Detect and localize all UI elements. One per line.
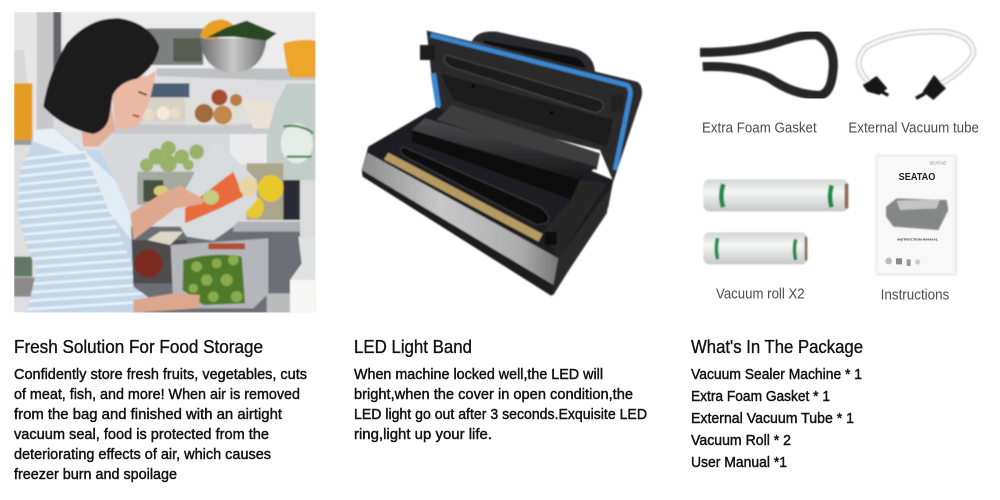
heading: What's In The Package: What's In The Package [691, 336, 863, 357]
body: food storage description [14, 366, 307, 483]
body: food storage description: of meat, fish, and more! When air is removed [14, 386, 300, 403]
fridge shelves [157, 68, 316, 80]
lower drawer [128, 240, 187, 283]
photo: woman storing vacuum-sealed food in a fridge [14, 12, 317, 313]
body: food storage description: deteriorating effects of air, which causes [14, 446, 271, 463]
milk bottle [290, 236, 304, 281]
body: list of package items: Vacuum Roll * 2 [691, 432, 791, 449]
label: External Vacuum tube: External Vacuum tube [848, 121, 979, 137]
body: list of package items [691, 366, 862, 471]
lid gasket [444, 55, 603, 113]
lemons [247, 163, 283, 220]
body: LED description: LED light go out after 3 seconds.Exquisite LED [354, 406, 647, 423]
body: food storage description: vacuum seal, food is protected from the [14, 426, 269, 443]
body: list of package items: Vacuum Sealer Machine * 1 [691, 366, 862, 383]
icon: foam gasket [700, 35, 833, 95]
shirt [17, 128, 150, 313]
body: list of package items: Extra Foam Gasket * 1 [691, 388, 830, 405]
body: list of package items: External Vacuum Tube * 1 [691, 410, 854, 427]
icon: instruction manual: SEATAO [899, 172, 936, 183]
LED band [431, 35, 630, 170]
vacuum bag with salmon [173, 154, 258, 242]
body: food storage description: freezer burn and spoilage [14, 466, 177, 483]
icon: instruction manual: INSTRUCTION MANUAL [897, 238, 938, 242]
open lid [427, 31, 642, 182]
label: Extra Foam Gasket: Extra Foam Gasket [702, 121, 817, 137]
body: LED description: bright,when the cover in open condition,the [354, 386, 633, 403]
body: LED description: When machine locked well,the LED will [354, 366, 603, 383]
body: LED description: ring,light up your life. [354, 426, 492, 443]
text block: package list [691, 336, 863, 471]
arm and hands [130, 184, 186, 240]
base right deck [543, 180, 607, 258]
broccoli box [137, 140, 204, 207]
glass jar [267, 83, 316, 180]
icon: small vacuum roll [703, 232, 807, 264]
neck and face [81, 105, 116, 148]
body: food storage description: Confidently store fresh fruits, vegetables, cuts [14, 366, 307, 383]
label: Vacuum roll X2: Vacuum roll X2 [716, 286, 805, 302]
body: list of package items: User Manual *1 [691, 454, 787, 471]
panel: package contents [700, 32, 979, 303]
stainless front panel [362, 153, 558, 285]
label: Instructions: Instructions [881, 287, 949, 303]
tan seal strip [384, 153, 543, 242]
top shelf containers [147, 28, 203, 65]
heading: Fresh Solution For Food Storage: Fresh Solution For Food Storage [14, 336, 263, 357]
body: LED description [354, 366, 647, 443]
lower seal channel [400, 147, 549, 225]
text block: food storage [14, 336, 307, 483]
left box [14, 217, 34, 297]
clear box with greens [171, 238, 268, 308]
hair [43, 18, 159, 134]
product image: vacuum sealer with LED band [362, 31, 642, 296]
base body [362, 107, 613, 295]
text block: LED light band [354, 336, 647, 443]
heading: LED Light Band: LED Light Band [354, 336, 472, 357]
body: food storage description: from the bag and finished with an airtight [14, 406, 283, 423]
juice bottle [14, 50, 27, 84]
icon: large vacuum roll [703, 179, 848, 211]
icon: external vacuum tube [859, 32, 973, 100]
icon: instruction manual [876, 155, 957, 275]
handle [472, 31, 595, 72]
middle shelf food [150, 83, 189, 97]
lower lid bowl and trough [437, 105, 600, 170]
icon: instruction manual: SEATAO [929, 160, 947, 165]
